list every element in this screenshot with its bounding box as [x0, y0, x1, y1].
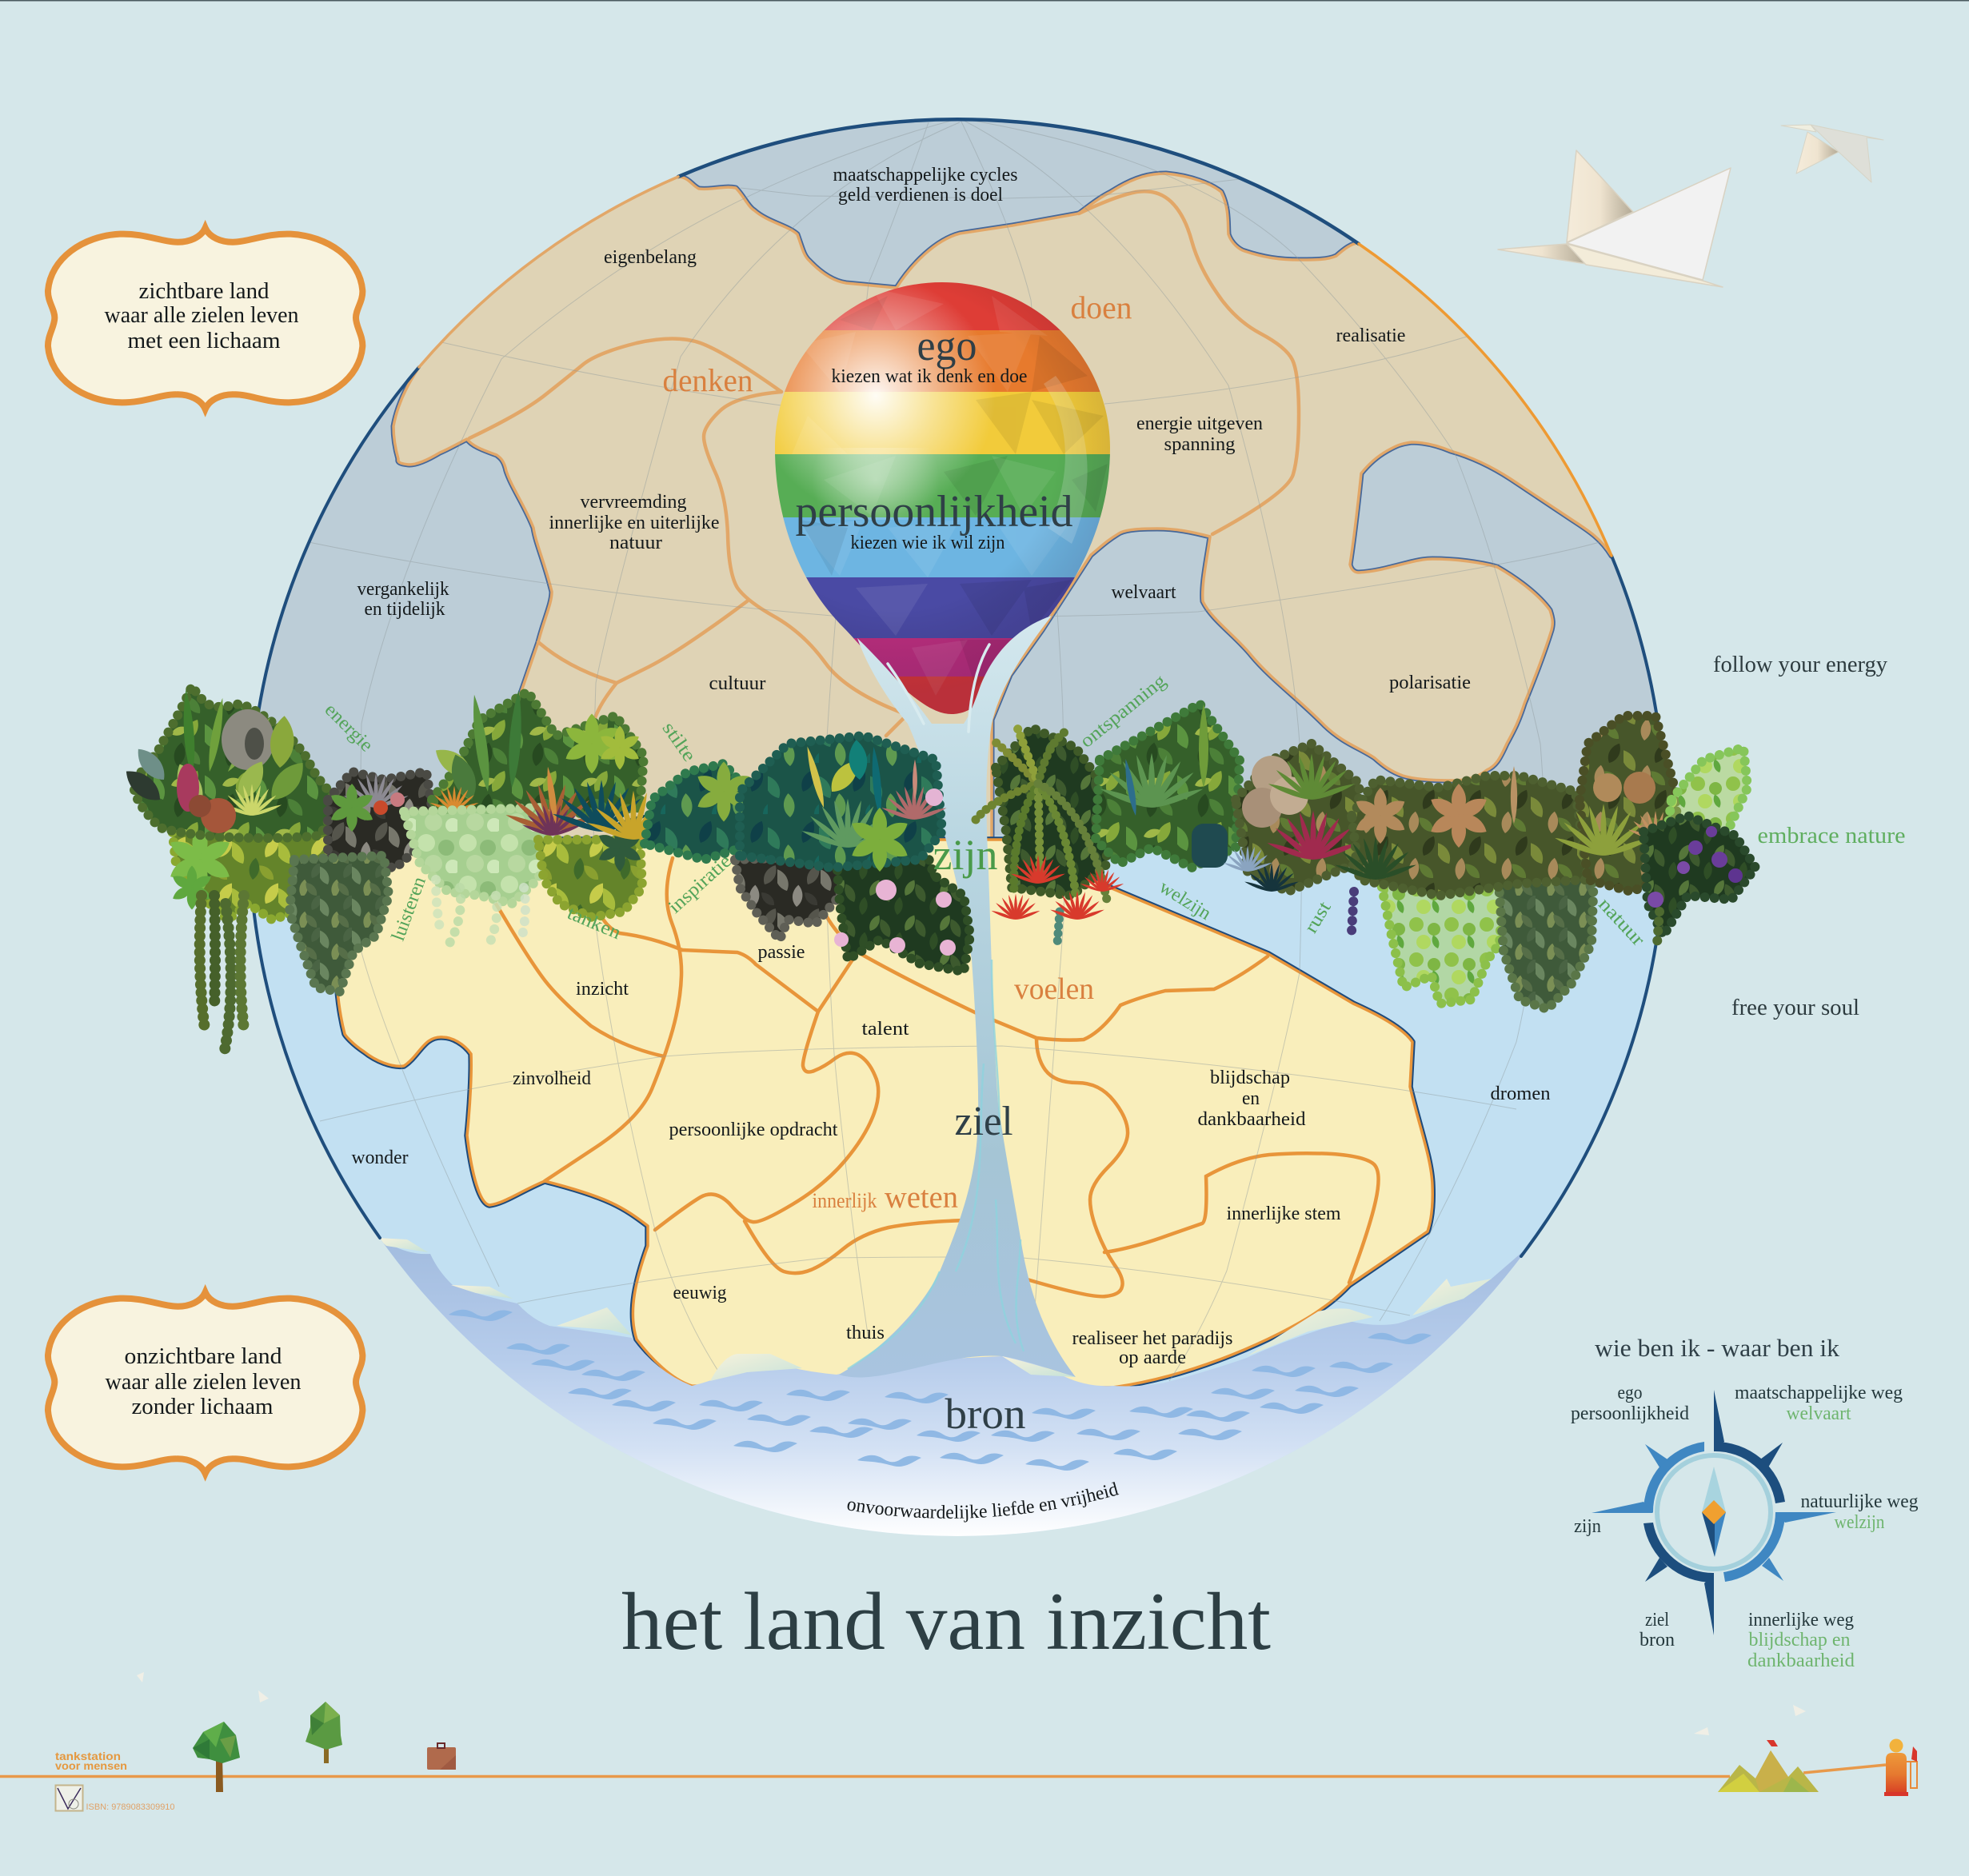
tiny birds — [137, 1672, 1806, 1735]
icon: tree 2 — [306, 1702, 342, 1763]
text: stilte: stilte — [658, 718, 700, 766]
text: ziel bron: ziel — [1645, 1610, 1669, 1631]
plant cluster: pale green hanging — [404, 808, 553, 946]
text: natuur: natuur — [1594, 894, 1648, 950]
origami bird small — [1781, 125, 1883, 182]
heading: innerlijk weten — [813, 1180, 958, 1215]
text: blijdschap en dankbaarheid: en — [1242, 1088, 1260, 1109]
globe water fill — [256, 122, 1655, 1386]
text: natuurlijke weg welzijn: welzijn — [1835, 1512, 1884, 1533]
title: het land van inzicht — [621, 1576, 1271, 1667]
icon: tree 1 — [193, 1722, 240, 1792]
text: ziel bron — [1640, 1610, 1675, 1650]
side text: follow your energy: follow your energy — [1713, 653, 1887, 677]
compass legend — [1571, 1334, 1918, 1671]
text: eigenbelang: eigenbelang — [604, 247, 697, 268]
text: vervreemding: natuur — [609, 533, 662, 553]
side text: embrace nature: embrace nature — [1758, 824, 1905, 848]
plant cluster: light green hanging vines — [1380, 880, 1504, 1004]
sea: bron — [381, 1238, 1522, 1536]
text: polarisatie: polarisatie — [1389, 673, 1471, 693]
origami bird large — [1498, 150, 1731, 287]
text: persoonlijkheid: persoonlijkheid — [795, 487, 1073, 537]
text: realiseer het paradijs: op aarde — [1119, 1347, 1186, 1368]
text: natuurlijke weg welzijn — [1801, 1491, 1918, 1533]
text: energie uitgeven spanning — [1136, 413, 1263, 455]
plant cluster: pothos — [538, 824, 643, 917]
brand: tankstation voor mensen: tankstation — [55, 1750, 121, 1762]
text: maatschappelijke weg welvaart: maatschappelijke weg — [1735, 1383, 1903, 1403]
text: inspiratie: inspiratie — [665, 851, 736, 918]
text: blijdschap en dankbaarheid — [1198, 1068, 1305, 1130]
text: luisteren: luisteren — [388, 874, 430, 944]
text: ziel bron: bron — [1640, 1630, 1675, 1650]
text: ontspanning: ontspanning — [1076, 671, 1170, 752]
callout: zichtbare land: waar alle zielen leven — [104, 303, 299, 328]
text: realiseer het paradijs: realiseer het paradijs — [1072, 1328, 1233, 1349]
callout: onzichtbare land: zonder lichaam — [131, 1395, 274, 1419]
text: bron: bron — [945, 1390, 1025, 1438]
callout: zichtbare land: met een lichaam — [128, 329, 281, 353]
heading: wie ben ik - waar ben ik: wie ben ik - waar ben ik — [1595, 1334, 1840, 1362]
logo — [56, 1785, 83, 1810]
text: ziel: ziel — [955, 1099, 1012, 1144]
text: vervreemding: innerlijke en uiterlijke — [549, 513, 720, 533]
text: passie: passie — [758, 942, 805, 963]
plant cluster: morning glory vines — [834, 848, 970, 972]
text: realiseer het paradijs — [1072, 1328, 1233, 1368]
text: wonder: wonder — [352, 1148, 408, 1168]
plant cluster: ferns — [1096, 704, 1240, 868]
plant cluster: hanging vines left — [166, 825, 342, 1050]
text: blijdschap en dankbaarheid: dankbaarheid — [1198, 1109, 1305, 1130]
globe — [240, 112, 1679, 1559]
text: vervreemding: vervreemding — [581, 492, 686, 513]
icon: compass — [1592, 1390, 1836, 1635]
text: natuurlijke weg welzijn: natuurlijke weg — [1801, 1491, 1918, 1512]
heading: doen: doen — [1070, 289, 1132, 325]
text: realisatie: realisatie — [1336, 325, 1406, 346]
heading: innerlijk weten: weten — [885, 1180, 958, 1215]
globe outline — [249, 119, 1666, 1256]
plant cluster: tall green — [429, 689, 644, 820]
text: vervreemding — [549, 492, 720, 553]
text: zijn: zijn — [1574, 1516, 1601, 1537]
plant cluster: teal jungle — [740, 736, 947, 872]
text: welzijn: welzijn — [1156, 876, 1215, 924]
plants: hanging garden band — [120, 686, 1755, 1050]
text: onvoorwaardelijke liefde en vrijheid: onvoorwaardelijke liefde en vrijheid — [848, 1482, 1120, 1523]
callout: onzichtbare land: onzichtbare land — [125, 1344, 282, 1369]
text: zinvolheid: zinvolheid — [513, 1068, 591, 1089]
callout: zichtbare land — [48, 228, 362, 409]
text: talent: talent — [862, 1019, 909, 1040]
plant cluster: purple leaves — [328, 772, 436, 868]
text: innerlijke weg blijdschap en dankbaarheid — [1747, 1610, 1855, 1671]
text: ego persoonlijkheid — [1571, 1383, 1689, 1424]
plant cluster: right olive — [1554, 716, 1683, 892]
heading: innerlijk weten: innerlijk — [813, 1189, 877, 1212]
text: innerlijke weg blijdschap en dankbaarheid: blijdschap en — [1748, 1630, 1851, 1650]
text: thuis: thuis — [846, 1323, 885, 1343]
waterfall stream: ziel — [839, 616, 1076, 1377]
text: innerlijke weg blijdschap en dankbaarheid: innerlijke weg — [1748, 1610, 1854, 1631]
text: vergankelijk en tijdelijk: vergankelijk — [357, 579, 449, 600]
text: persoonlijke opdracht: persoonlijke opdracht — [669, 1120, 838, 1140]
plant cluster: spiky plants — [505, 766, 681, 842]
text: kiezen wie ik wil zijn: kiezen wie ik wil zijn — [851, 533, 1004, 553]
plant cluster: mid green — [645, 761, 756, 860]
text: maatschappelijke cycles — [833, 165, 1017, 206]
labels: lower land — [352, 942, 1550, 1523]
text: maatschappelijke weg welvaart: welvaart — [1787, 1403, 1851, 1424]
heading: voelen: voelen — [1014, 972, 1094, 1006]
text: blijdschap en dankbaarheid: blijdschap — [1210, 1068, 1290, 1088]
text: maatschappelijke weg welvaart — [1735, 1383, 1903, 1424]
text: energie uitgeven spanning: spanning — [1164, 434, 1235, 455]
plant cluster: ivy — [290, 856, 389, 992]
bottom line — [0, 1765, 1886, 1777]
callout: onzichtbare land — [48, 1292, 362, 1474]
plant cluster: dark hanging vines — [1498, 872, 1594, 1009]
plant cluster: purple flowers — [1352, 816, 1755, 944]
callout: zichtbare land: zichtbare land — [139, 279, 269, 304]
text: tanken: tanken — [564, 903, 624, 944]
text: eeuwig: eeuwig — [673, 1283, 726, 1303]
labels: upper land — [357, 165, 1471, 694]
plant cluster: grey leaves — [735, 856, 844, 940]
text: ego persoonlijkheid: ego — [1617, 1383, 1643, 1403]
text: ISBN: ISBN: 9789083309910 — [86, 1802, 174, 1812]
plant cluster: hanging palm with red flowers — [976, 724, 1124, 944]
text: innerlijke weg blijdschap en dankbaarheid: dankbaarheid — [1747, 1650, 1855, 1671]
plant cluster: far left tropical — [120, 686, 336, 838]
heading: denken: denken — [662, 362, 753, 398]
lower land: onzichtbare land — [337, 840, 1432, 1387]
text: vergankelijk en tijdelijk: en tijdelijk — [365, 599, 445, 620]
text: kiezen wat ik denk en doe: kiezen wat ik denk en doe — [832, 366, 1027, 387]
plant cluster: bright vine right — [1667, 748, 1747, 848]
text: inzicht: inzicht — [576, 979, 629, 1000]
text: maatschappelijke cycles: geld verdienen is doel — [838, 185, 1003, 206]
text: ego persoonlijkheid: persoonlijkheid — [1571, 1403, 1689, 1424]
text: ego: ego — [917, 321, 977, 369]
text: energie uitgeven spanning: energie uitgeven — [1136, 413, 1263, 434]
text: welvaart: welvaart — [1112, 582, 1176, 603]
callout: onzichtbare land: waar alle zielen leven — [106, 1370, 301, 1395]
labels: plant band green words — [321, 671, 1648, 950]
icon: briefcase — [427, 1743, 456, 1770]
brand: tankstation voor mensen: voor mensen — [55, 1759, 127, 1772]
text: dromen: dromen — [1491, 1084, 1550, 1104]
plant cluster: mixed shrubs — [1334, 766, 1588, 896]
text: vergankelijk en tijdelijk — [357, 579, 449, 620]
side text: free your soul: free your soul — [1731, 996, 1859, 1020]
brand: tankstation voor mensen — [55, 1750, 127, 1772]
upper land: zichtbare land — [393, 174, 1612, 840]
icon: mountain with flag — [1718, 1740, 1819, 1792]
icon: fuel pump — [1884, 1738, 1917, 1796]
text: cultuur: cultuur — [709, 673, 766, 694]
balloon: rainbow — [768, 280, 1120, 716]
text: rust: rust — [1300, 898, 1336, 937]
text: energie: energie — [321, 700, 377, 756]
text: maatschappelijke cycles: maatschappelijke cycles — [833, 165, 1017, 186]
heading: zijn: zijn — [933, 831, 998, 879]
text: innerlijke stem: innerlijke stem — [1227, 1203, 1341, 1224]
plant cluster: pampas and red bromelia — [1223, 744, 1360, 893]
